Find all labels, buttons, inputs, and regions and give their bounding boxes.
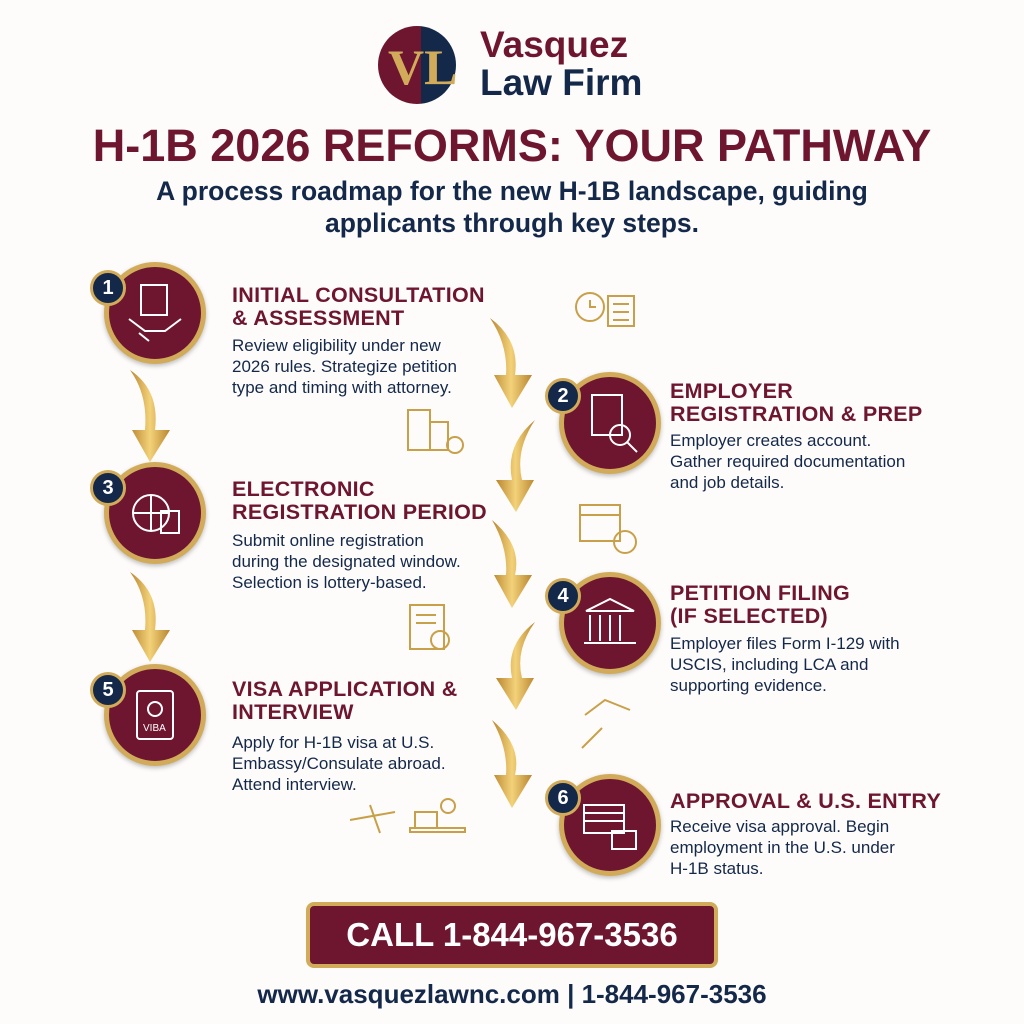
text: H-1B status. — [670, 859, 764, 878]
text: Embassy/Consulate abroad. — [232, 754, 446, 773]
text — [232, 531, 461, 592]
text — [670, 431, 905, 492]
title: H-1B 2026 REFORMS: YOUR PATHWAY — [93, 120, 931, 171]
heading: & ASSESSMENT — [232, 306, 404, 330]
text: type and timing with attorney. — [232, 378, 452, 397]
logo mark — [378, 26, 456, 104]
CTA button: CALL 1-844-967-3536 — [346, 916, 678, 953]
icon: passport: VIBA — [143, 723, 166, 734]
icon: flag briefcase — [559, 774, 661, 876]
text — [232, 336, 457, 397]
heading — [232, 677, 458, 724]
heading: INITIAL CONSULTATION — [232, 283, 485, 307]
logo text: Law Firm — [480, 62, 642, 103]
logo text — [480, 24, 642, 103]
step 3 — [90, 462, 487, 592]
step 6: 6 — [557, 787, 569, 809]
step 5: 5 — [102, 679, 114, 701]
icon: document search — [559, 372, 661, 474]
heading: (IF SELECTED) — [670, 604, 828, 628]
text: Gather required documentation — [670, 452, 905, 471]
text: Employer files Form I-129 with — [670, 634, 900, 653]
small icons — [350, 293, 636, 833]
CTA button — [306, 902, 718, 968]
heading: ELECTRONIC — [232, 477, 375, 501]
step 4: 4 — [557, 585, 569, 607]
heading — [670, 379, 923, 426]
text: Apply for H-1B visa at U.S. — [232, 733, 434, 752]
text: Selection is lottery-based. — [232, 573, 427, 592]
text — [670, 817, 895, 878]
icon: handshake — [104, 262, 206, 364]
text — [232, 733, 446, 794]
subtitle — [156, 176, 868, 238]
heading: APPROVAL & U.S. ENTRY — [670, 789, 941, 813]
heading — [232, 477, 487, 524]
text: employment in the U.S. under — [670, 838, 895, 857]
step 6 — [545, 774, 941, 880]
step 5 — [90, 664, 458, 794]
heading — [232, 283, 485, 330]
text: Employer creates account. — [670, 431, 871, 450]
text: USCIS, including LCA and — [670, 655, 868, 674]
subtitle: A process roadmap for the new H-1B landscape, guiding — [156, 176, 868, 206]
logo mark: VL — [388, 39, 457, 95]
text: Review eligibility under new — [232, 336, 441, 355]
heading: INTERVIEW — [232, 700, 354, 724]
text: 2026 rules. Strategize petition — [232, 357, 457, 376]
text: supporting evidence. — [670, 676, 827, 695]
heading: REGISTRATION & PREP — [670, 402, 923, 426]
step 1 — [90, 262, 485, 397]
text: during the designated window. — [232, 552, 461, 571]
step 4 — [545, 572, 900, 695]
text: Receive visa approval. Begin — [670, 817, 889, 836]
subtitle: applicants through key steps. — [325, 208, 699, 238]
step 3: 3 — [102, 477, 114, 499]
heading: VISA APPLICATION & — [232, 677, 458, 701]
footer: www.vasquezlawnc.com | 1-844-967-3536 — [257, 979, 767, 1009]
step 2: 2 — [557, 385, 569, 407]
step 1: 1 — [102, 277, 114, 299]
icon: passport — [104, 664, 206, 766]
text: Attend interview. — [232, 775, 357, 794]
text: Submit online registration — [232, 531, 424, 550]
text — [670, 634, 900, 695]
step 2 — [545, 372, 923, 492]
icon: globe — [104, 462, 206, 564]
icon: courthouse — [559, 572, 661, 674]
logo text: Vasquez — [480, 24, 628, 65]
logo — [378, 24, 642, 104]
heading: PETITION FILING — [670, 581, 850, 605]
heading: REGISTRATION PERIOD — [232, 500, 487, 524]
heading — [670, 581, 850, 628]
heading: EMPLOYER — [670, 379, 793, 403]
text: and job details. — [670, 473, 784, 492]
